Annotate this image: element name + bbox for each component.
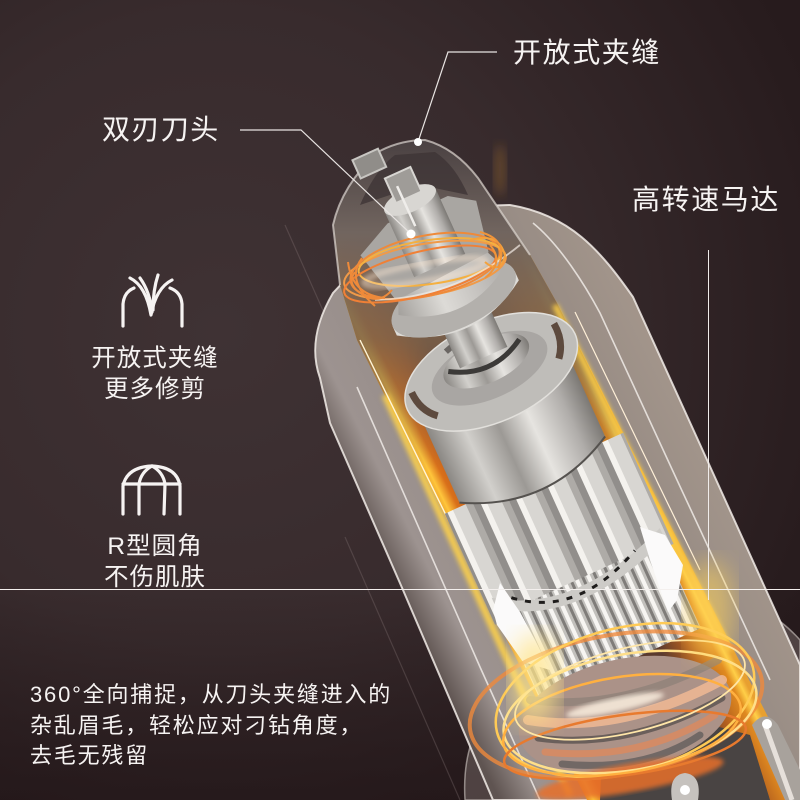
- body swirl glow rings: [458, 598, 774, 800]
- inner tube and head capsule: [333, 140, 790, 800]
- leader: open gap: [414, 52, 497, 146]
- post cylinders: [380, 178, 465, 277]
- text: feature one: [91, 345, 219, 403]
- disc with cone: [369, 218, 528, 356]
- ring plate: [378, 268, 596, 455]
- label: double blade head: 双刃刀头: [102, 114, 220, 145]
- label: high speed motor: 高转速马达: [632, 184, 780, 215]
- head swirl rings: [339, 221, 520, 314]
- text: description: 360°全向捕捉，从刀头夹缝进入的: [30, 682, 392, 707]
- faint diagonal lines: [285, 225, 460, 800]
- yellow light streaks: [360, 305, 730, 795]
- interior stripes below gear: [508, 638, 742, 800]
- text: description: [30, 682, 392, 768]
- glow spots: [494, 144, 734, 726]
- flange: [353, 186, 500, 306]
- motor can: [416, 342, 614, 523]
- outer glass body: [315, 205, 800, 800]
- horizontal divider: [0, 588, 800, 590]
- base dome: [465, 600, 800, 800]
- text: feature two: [104, 533, 206, 591]
- leader: motor: [708, 250, 710, 600]
- icon: rounded dome: [123, 466, 180, 514]
- label: open gap: 开放式夹缝: [513, 37, 661, 68]
- device parts rotated along axis: [296, 105, 710, 705]
- text: description: 去毛无残留: [30, 743, 149, 768]
- leader: double blade: [240, 130, 416, 238]
- dark base: [600, 722, 770, 800]
- gear teeth: [445, 433, 710, 705]
- text: feature two: R型圆角: [107, 533, 203, 560]
- inner glass white line: [357, 223, 770, 800]
- icon: open gap: [123, 275, 182, 326]
- text: feature one: 开放式夹缝: [91, 345, 219, 372]
- white torn patches: [493, 527, 683, 670]
- text: feature two: 不伤肌肤: [104, 564, 206, 591]
- plug pins: [671, 716, 800, 800]
- blades: [352, 140, 433, 239]
- text: description: 杂乱眉毛，轻松应对刁钻角度，: [30, 712, 363, 738]
- text: feature one: 更多修剪: [104, 376, 206, 403]
